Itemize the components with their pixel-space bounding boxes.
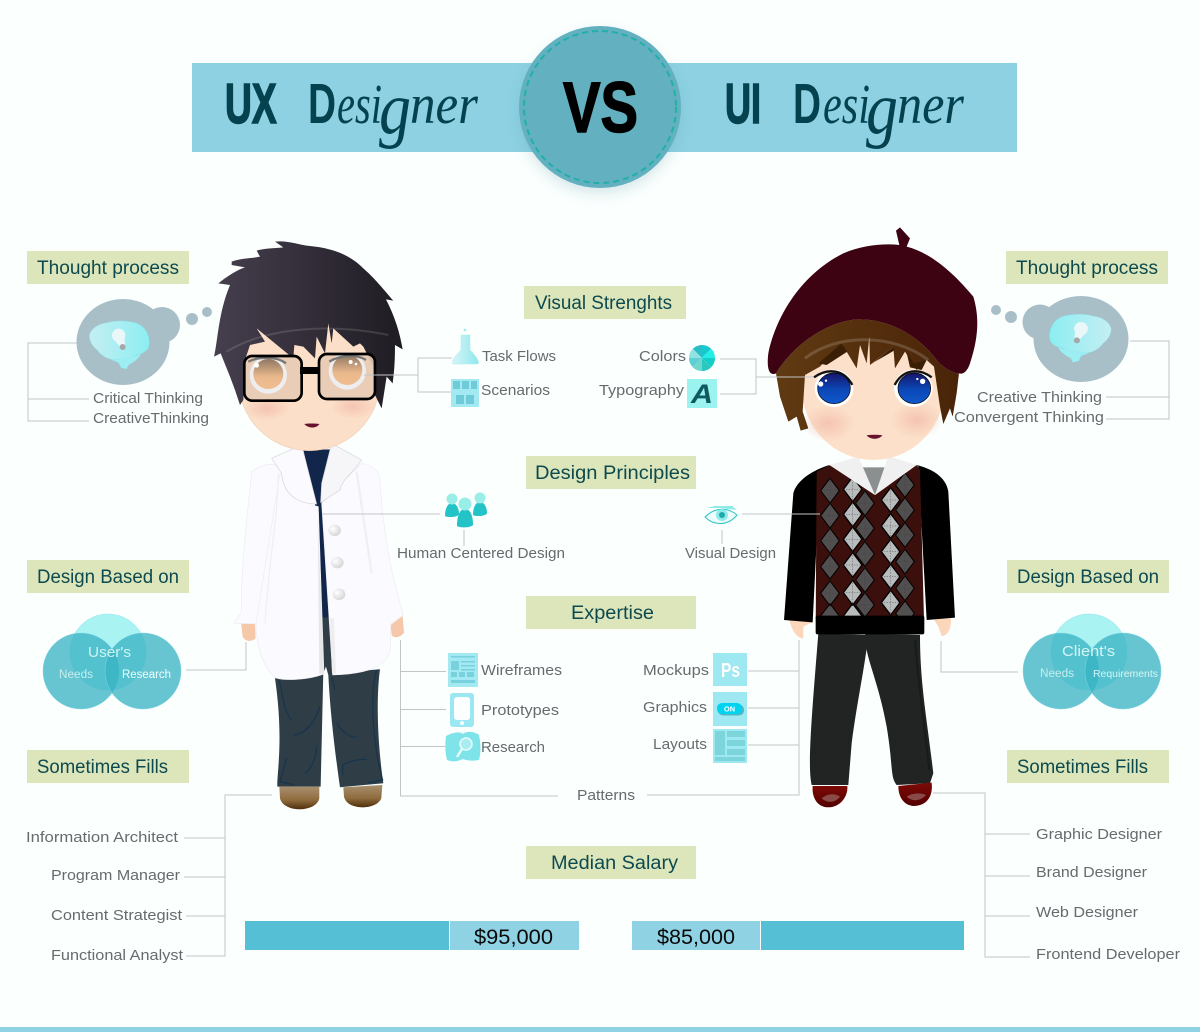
heading: design principles	[526, 456, 696, 489]
heading: design based on right	[1007, 560, 1169, 593]
venn diagram: right	[1023, 614, 1161, 709]
heading: thought process right	[1006, 251, 1168, 284]
heading: thought process left	[27, 251, 189, 284]
list: UX sometimes fills: Information Architect	[26, 829, 179, 846]
heading: thought process left: Thought process	[37, 258, 179, 279]
heading: sometimes fills right: Sometimes Fills	[1017, 757, 1148, 778]
icon: scenarios	[451, 379, 479, 407]
icon: wireframes	[448, 653, 478, 687]
icon: flask	[452, 329, 479, 364]
text: mockups: Mockups	[643, 662, 709, 679]
text: prototypes: Prototypes	[481, 702, 559, 719]
list: UX sometimes fills: Content Strategist	[51, 907, 183, 924]
ui body	[784, 456, 955, 807]
heading: design based on left	[27, 560, 189, 593]
heading: expertise	[526, 596, 696, 629]
heading: sometimes fills left: Sometimes Fills	[37, 757, 168, 778]
text: graphics: Graphics	[643, 699, 707, 716]
venn diagram: left: User's	[88, 644, 131, 661]
salary bar: UI: $85,000	[657, 926, 735, 949]
text: left thought process: Critical Thinking	[93, 390, 203, 407]
icon: thought bubble left	[76, 299, 212, 385]
connector lines	[28, 341, 1169, 957]
text: right thought process: Creative Thinking	[977, 389, 1102, 406]
icon: prototype phone	[450, 693, 474, 727]
text: left thought process	[93, 390, 209, 427]
VS badge	[519, 26, 681, 188]
title banner	[192, 63, 1017, 152]
venn diagram: left: Needs	[59, 669, 93, 681]
heading: median salary	[526, 846, 696, 879]
list: UX sometimes fills: Functional Analyst	[51, 947, 184, 964]
list: UI sometimes fills: Frontend Developer	[1036, 946, 1180, 963]
title: UX Designer: UX	[225, 72, 287, 136]
icon: typography A: A	[690, 379, 713, 409]
text: colors: Colors	[639, 348, 686, 365]
text: typography: Typography	[599, 382, 685, 399]
text: right thought process	[954, 389, 1104, 426]
heading: thought process right: Thought process	[1016, 258, 1158, 279]
salary bar: UX: $95,000	[474, 926, 553, 949]
bottom strip	[0, 1027, 1200, 1032]
list: UI sometimes fills	[1036, 826, 1180, 963]
title: UI Designer: ner	[897, 74, 964, 136]
title: UX Designer: D	[308, 72, 336, 136]
character: UX designer	[214, 241, 404, 809]
venn diagram: left: Research	[122, 669, 171, 681]
icon: photoshop	[713, 653, 747, 686]
icon: typography A	[687, 379, 717, 409]
list: UI sometimes fills: Graphic Designer	[1036, 826, 1162, 843]
ui head	[768, 227, 977, 460]
list: UX sometimes fills	[26, 829, 184, 964]
icon: on toggle	[713, 692, 747, 726]
list: UI sometimes fills: Web Designer	[1036, 904, 1138, 921]
ux body	[234, 443, 404, 809]
heading: sometimes fills right	[1007, 750, 1169, 783]
venn diagram: right: Requirements	[1093, 668, 1158, 680]
text: layouts: Layouts	[653, 736, 707, 753]
text: task flows: Task Flows	[482, 348, 556, 365]
text: left thought process: CreativeThinking	[93, 410, 209, 427]
title: UX Designer: esi	[337, 74, 382, 136]
icon: thought bubble right	[991, 296, 1128, 382]
text: research: Research	[481, 739, 545, 756]
text: patterns: Patterns	[577, 787, 635, 804]
venn diagram: right: Needs	[1040, 668, 1074, 680]
heading: median salary: Median Salary	[551, 853, 679, 874]
text: scenarios: Scenarios	[481, 382, 550, 399]
icon: layout	[713, 729, 747, 763]
text: right thought process: Convergent Thinking	[954, 409, 1104, 426]
title: UX Designer: ner	[410, 74, 478, 136]
list: UI sometimes fills: Brand Designer	[1036, 864, 1147, 881]
venn diagram: left	[43, 614, 181, 709]
ux head	[214, 241, 403, 451]
title: UI Designer: esi	[823, 74, 870, 136]
icon: research book	[445, 732, 480, 761]
heading: design based on right: Design Based on	[1017, 567, 1159, 588]
text: wireframes: Wireframes	[481, 662, 562, 679]
heading: visual strengths	[524, 286, 686, 319]
venn diagram: right: Client's	[1062, 643, 1115, 660]
icon: people	[445, 492, 487, 527]
salary bar: UX	[245, 921, 579, 950]
list: UX sometimes fills: Program Manager	[51, 867, 180, 884]
heading: design based on left: Design Based on	[37, 567, 179, 588]
title: UX Designer: g	[379, 68, 411, 150]
title: UI Designer: g	[866, 68, 898, 150]
icon: photoshop: Ps	[721, 660, 740, 682]
text: visual design: Visual Design	[685, 545, 776, 562]
icon: eye	[705, 506, 737, 524]
heading: visual strengths: Visual Strenghts	[535, 293, 672, 314]
heading: design principles: Design Principles	[535, 463, 690, 484]
icon: on toggle: ON	[724, 704, 735, 714]
title: UI Designer: UI	[725, 72, 771, 136]
text: human centered design: Human Centered Design	[397, 545, 565, 562]
salary bar: UI	[632, 921, 964, 950]
heading: sometimes fills left	[27, 750, 189, 783]
title: UI Designer: D	[793, 72, 821, 136]
character: UI designer	[768, 227, 977, 807]
icon: color wheel	[689, 345, 715, 371]
heading: expertise: Expertise	[571, 603, 654, 624]
VS badge: VS	[563, 69, 638, 148]
